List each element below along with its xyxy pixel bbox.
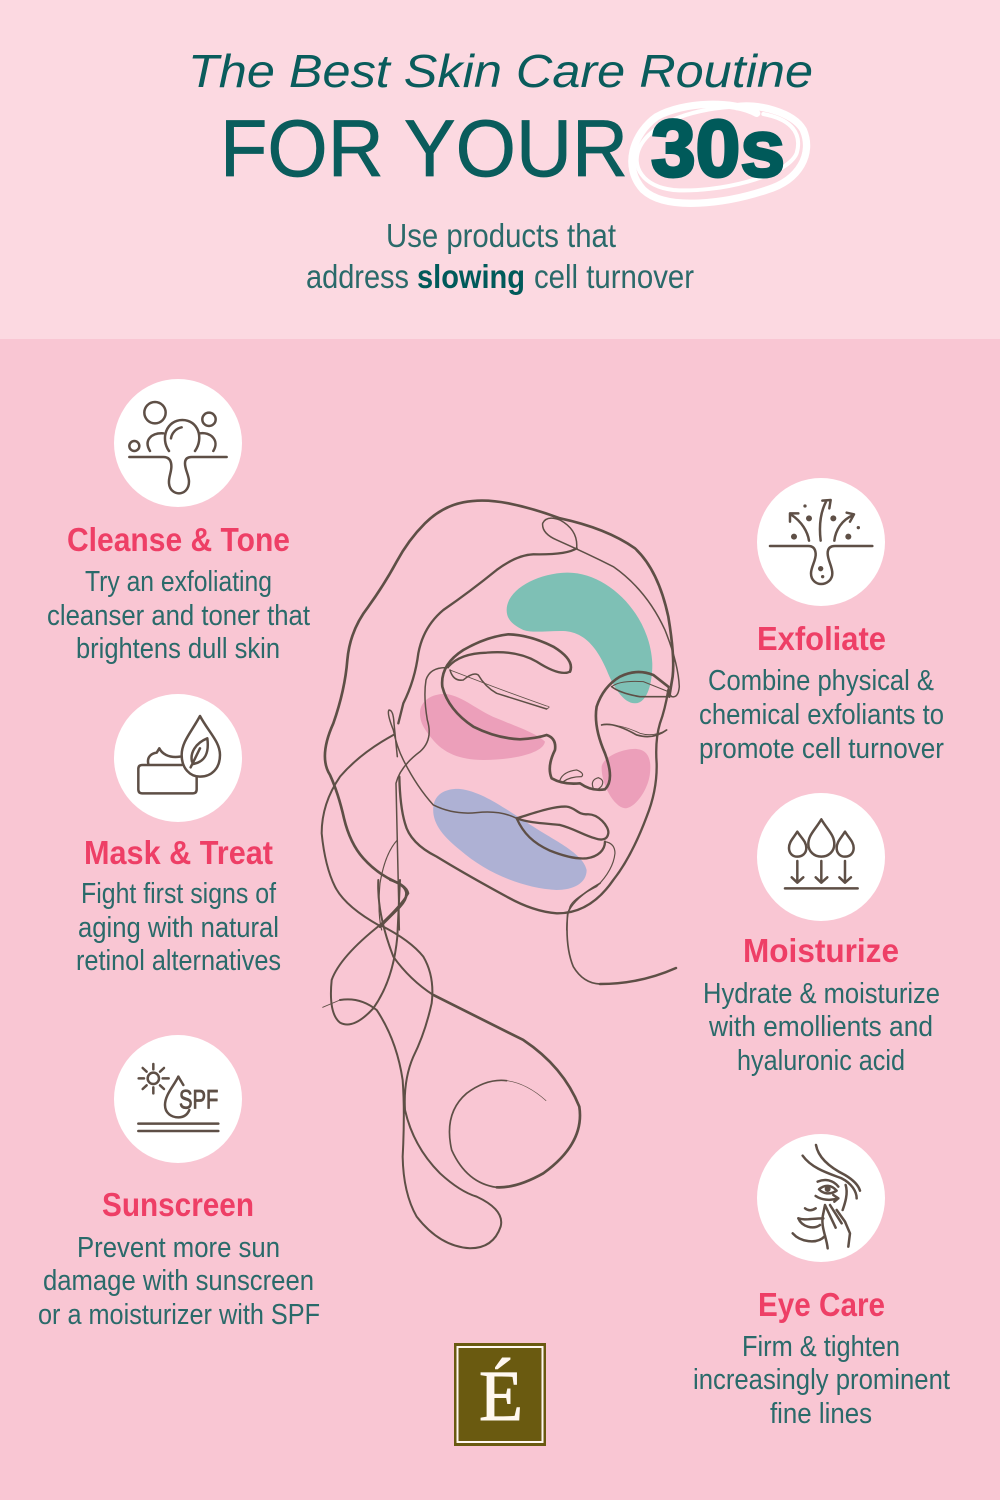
body text: [703, 978, 940, 1077]
header: title block: [188, 45, 813, 295]
icon: sun, drop and SPF: SPF: [179, 1084, 218, 1114]
heading: Sunscreen: [102, 1186, 254, 1223]
icon: pore with arrows: [757, 478, 885, 606]
body text: hyaluronic acid: [737, 1045, 905, 1077]
icon: face with hand at eye: [757, 1134, 885, 1262]
body text: chemical exfoliants to: [699, 699, 944, 731]
highlight scribble around 30s: [632, 104, 807, 203]
body text: brightens dull skin: [76, 633, 280, 665]
panel: Cleanse & Tone: [47, 379, 310, 665]
subtitle: cell turnover: [534, 258, 694, 295]
body text: promote cell turnover: [699, 733, 944, 765]
panel: Moisturize: [703, 793, 940, 1077]
body text: Fight first signs of: [81, 878, 277, 910]
body text: Combine physical &: [708, 665, 934, 697]
body text: [38, 1232, 320, 1331]
heading: Cleanse & Tone: [67, 521, 290, 558]
lower flowing hair lines: [323, 880, 600, 1248]
subtitle: Use products that: [386, 217, 616, 254]
body text: [699, 665, 944, 765]
body text: with emollients and: [708, 1011, 933, 1043]
icon: cleansing bubbles: [114, 379, 242, 507]
body text: retinol alternatives: [76, 945, 281, 977]
face line illustration: [322, 501, 679, 1248]
icon: drops with arrows: [757, 793, 885, 921]
body text: cleanser and toner that: [47, 600, 310, 632]
body text: [47, 566, 310, 665]
face and upper hair lines: [322, 501, 679, 930]
heading: Moisturize: [743, 932, 899, 969]
title line 1: The Best Skin Care Routine: [188, 45, 813, 97]
body text: or a moisturizer with SPF: [38, 1299, 320, 1331]
subtitle: address: [306, 258, 409, 295]
neck tail line: [600, 968, 676, 984]
panel: Exfoliate: [699, 478, 944, 765]
subtitle: [306, 217, 694, 295]
body text: increasingly prominent: [693, 1364, 950, 1396]
body text: Hydrate & moisturize: [703, 978, 940, 1010]
colour patches on face: [420, 573, 652, 890]
icon: sun, drop and SPF: [114, 1035, 242, 1163]
subtitle: slowing: [417, 258, 525, 295]
heading: Eye Care: [758, 1286, 885, 1323]
panel: Mask & Treat: [76, 694, 281, 977]
heading: Exfoliate: [757, 620, 886, 657]
body text: Try an exfoliating: [85, 566, 272, 598]
icon: cream jar and leaf drop: [114, 694, 242, 822]
body text: Firm & tighten: [742, 1331, 900, 1363]
body text: damage with sunscreen: [43, 1265, 314, 1297]
body text: fine lines: [770, 1398, 872, 1430]
body text: aging with natural: [78, 912, 279, 944]
body text: [76, 878, 281, 977]
title emphasis: 30s: 30s: [651, 104, 785, 194]
title line 2: FOR YOUR: [220, 104, 628, 194]
heading: Mask & Treat: [84, 834, 273, 871]
panel: Eye Care: [693, 1134, 950, 1430]
body text: Prevent more sun: [77, 1232, 280, 1264]
panel: Sunscreen: [38, 1035, 320, 1331]
logo: É: [479, 1356, 523, 1436]
body text: [693, 1331, 950, 1430]
logo: [454, 1343, 546, 1446]
